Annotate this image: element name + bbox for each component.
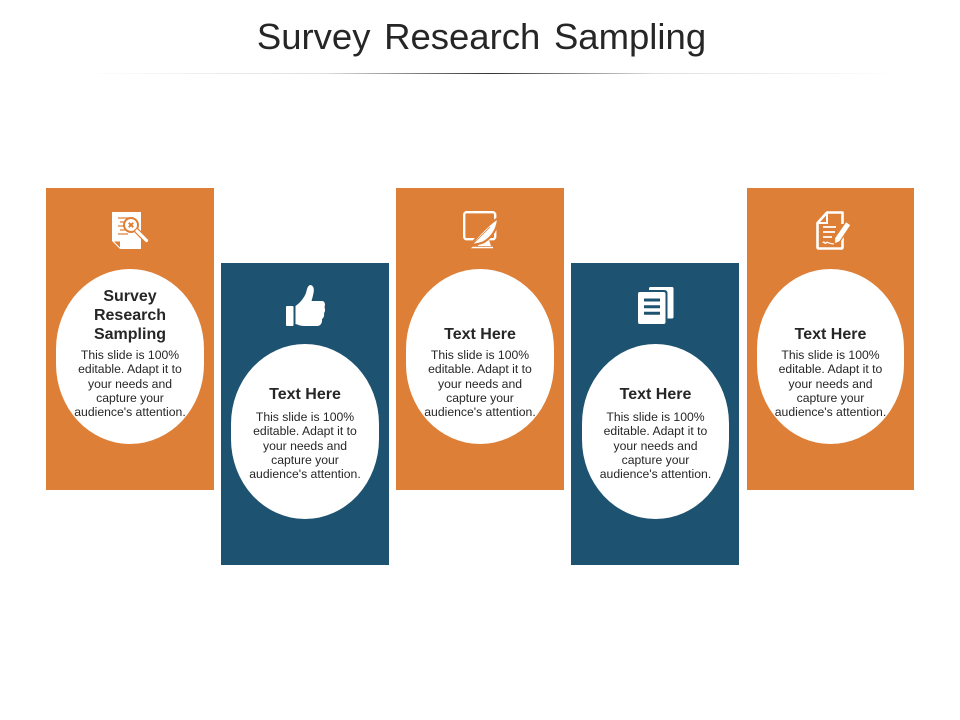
panel: text here 4 xyxy=(571,263,739,565)
oval: text content xyxy=(757,269,904,444)
text block: This slide is 100% xyxy=(431,348,529,362)
oval: text content xyxy=(406,269,554,444)
text block: capture your xyxy=(271,453,339,467)
text block: your needs and xyxy=(263,438,347,452)
text block xyxy=(74,348,186,419)
icon: stacked documents xyxy=(638,287,674,324)
text block: capture your xyxy=(96,391,164,405)
text block: This slide is 100% xyxy=(606,410,705,424)
text block: your needs and xyxy=(438,376,522,390)
text block: editable. Adapt it to xyxy=(428,362,532,376)
text block: audience's attention. xyxy=(775,405,886,419)
text block xyxy=(600,410,711,481)
panel: text here 2 xyxy=(221,263,389,565)
text block xyxy=(775,348,886,419)
icon: monitor with quill xyxy=(463,211,497,248)
heading xyxy=(94,288,166,343)
text block xyxy=(424,348,536,419)
heading: Text Here xyxy=(620,386,691,402)
text block: editable. Adapt it to xyxy=(253,424,357,438)
oval: text content xyxy=(582,344,729,519)
text block: This slide is 100% xyxy=(256,410,354,424)
text block: capture your xyxy=(622,453,689,467)
icon: document with magnifier xyxy=(112,212,148,249)
text block: audience's attention. xyxy=(424,405,536,419)
text block: your needs and xyxy=(788,376,873,390)
heading: Text Here xyxy=(269,386,341,402)
icon: thumbs up xyxy=(286,285,325,326)
heading: Survey xyxy=(103,288,157,305)
text block: editable. Adapt it to xyxy=(604,424,707,438)
heading: Text Here xyxy=(444,326,516,342)
oval: text content xyxy=(56,269,204,444)
text block: your needs and xyxy=(88,376,172,390)
text block: your needs and xyxy=(613,438,698,452)
text block: This slide is 100% xyxy=(81,348,179,362)
text block: capture your xyxy=(446,391,514,405)
text block: capture your xyxy=(797,391,864,405)
text block: audience's attention. xyxy=(600,467,711,481)
oval: text content xyxy=(231,344,379,519)
heading: Research xyxy=(94,307,166,324)
icon: document with pen xyxy=(816,211,850,250)
text block: This slide is 100% xyxy=(781,348,880,362)
heading: Text Here xyxy=(795,326,866,342)
title: Survey Research Sampling xyxy=(257,16,706,57)
text block: editable. Adapt it to xyxy=(78,362,182,376)
panel: text here 3 xyxy=(396,188,564,490)
heading: Sampling xyxy=(94,326,166,343)
panel: text here 5 xyxy=(747,188,914,490)
text block xyxy=(249,410,361,481)
text block: editable. Adapt it to xyxy=(779,362,882,376)
panel: survey research sampling xyxy=(46,188,214,490)
text block: audience's attention. xyxy=(249,467,361,481)
text block: audience's attention. xyxy=(74,405,186,419)
